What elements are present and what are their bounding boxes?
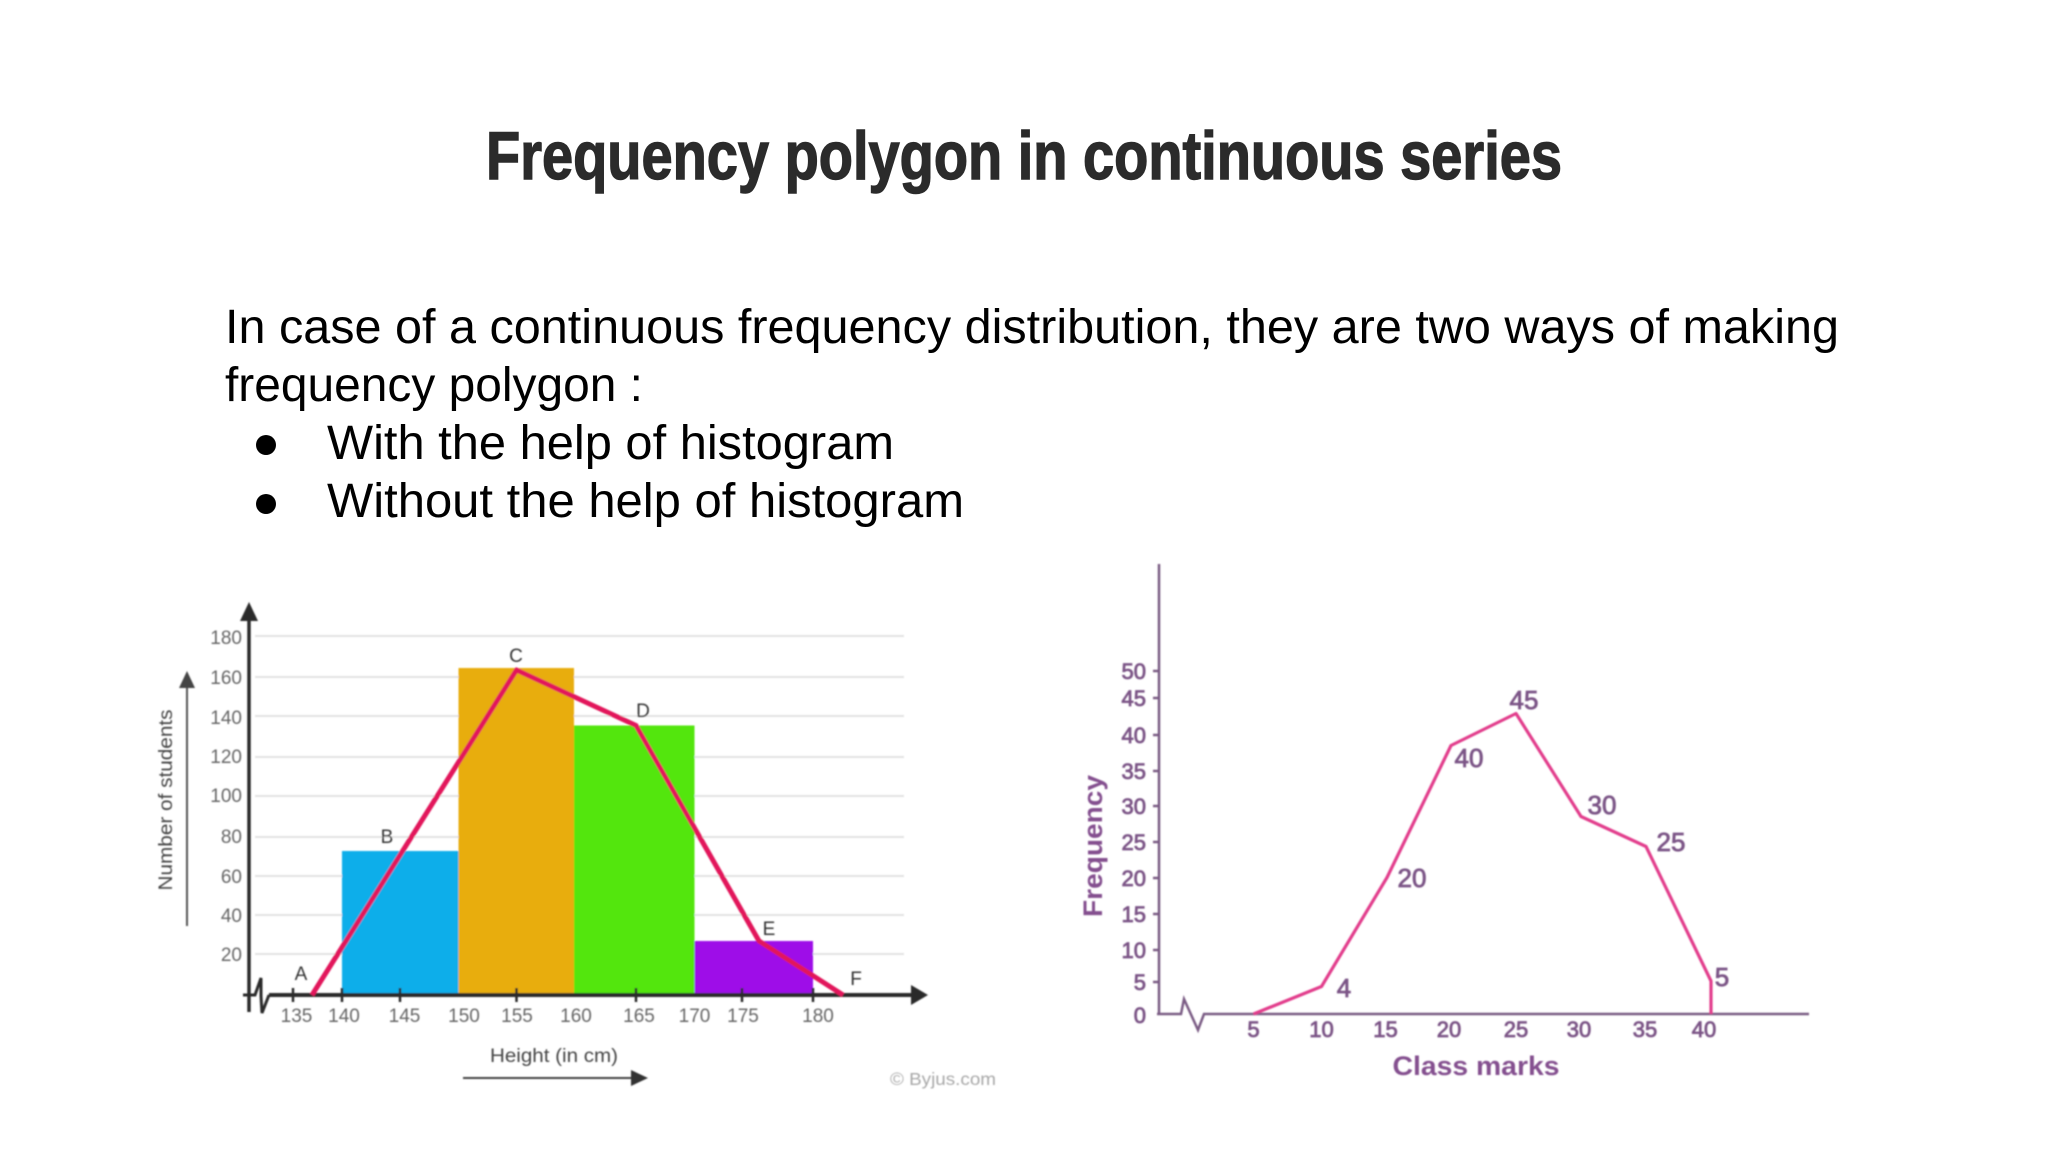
y axis title and arrow [156, 671, 195, 926]
y axis tick labels: 160 [210, 668, 242, 689]
y axis tick labels [210, 628, 242, 966]
x axis tick labels [1247, 1017, 1716, 1042]
y axis tick labels: 45 [1122, 686, 1146, 711]
y axis title: Frequency [1078, 775, 1108, 917]
y axis tick labels: 80 [221, 827, 242, 848]
x axis title and arrow [463, 1046, 648, 1086]
y axis tick labels: 120 [210, 747, 242, 768]
x axis tick labels: 145 [389, 1006, 420, 1027]
x axis tick labels: 175 [727, 1006, 759, 1027]
point labels: A [295, 964, 308, 985]
text block: introduction and bullets: In case of a continuous frequency distribution, they are two ways of making [225, 301, 1839, 354]
x axis tick labels: 150 [448, 1006, 480, 1027]
point labels: C [509, 646, 523, 667]
point labels: 4 [1337, 973, 1351, 1003]
y axis title and arrow: Number of students [156, 710, 177, 890]
x axis tick labels [281, 1006, 834, 1027]
x axis tick labels: 170 [679, 1006, 710, 1027]
y axis tick labels: 10 [1122, 938, 1146, 963]
x axis tick labels: 135 [281, 1006, 312, 1027]
x axis tick labels: 30 [1567, 1017, 1591, 1042]
credit: © Byjus.com [890, 1069, 996, 1089]
x axis title and arrow: Height (in cm) [490, 1046, 618, 1067]
y axis tick labels: 140 [210, 708, 242, 729]
text block: introduction and bullets: With the help of histogram [327, 417, 894, 470]
point labels: 45 [1510, 685, 1538, 715]
x axis tick labels: 165 [623, 1006, 655, 1027]
point labels: F [850, 969, 862, 990]
y axis tick labels: 60 [221, 867, 242, 888]
point labels: E [763, 919, 775, 940]
point labels: 25 [1657, 827, 1685, 857]
y axis tick labels: 20 [1122, 866, 1146, 891]
text block: introduction and bullets: frequency polygon : [225, 359, 643, 412]
point labels: 20 [1398, 863, 1426, 893]
x axis tick labels: 10 [1309, 1017, 1334, 1042]
histogram bars [342, 668, 813, 995]
polygon line [1254, 714, 1711, 1014]
y axis tick labels: 0 [1134, 1003, 1146, 1028]
chart: frequency polygon without histogram [1078, 564, 1809, 1081]
point labels: D [636, 701, 650, 722]
y axis tick labels: 40 [221, 906, 242, 927]
point labels: 30 [1588, 790, 1616, 820]
x axis tick labels: 155 [501, 1006, 533, 1027]
x axis tick labels: 5 [1247, 1017, 1260, 1042]
x axis tick labels: 35 [1633, 1017, 1657, 1042]
x axis tick labels: 140 [328, 1006, 360, 1027]
y axis tick labels: 100 [210, 786, 242, 807]
y axis tick labels: 25 [1122, 830, 1146, 855]
frequency polygon line [312, 670, 843, 995]
x axis tick labels: 160 [560, 1006, 592, 1027]
text block: introduction and bullets [225, 301, 1839, 528]
text block: introduction and bullets: Without the help of histogram [327, 475, 964, 528]
axis arrowheads [240, 602, 928, 1005]
x axis tick labels: 20 [1437, 1017, 1461, 1042]
y axis tick labels: 20 [221, 945, 242, 966]
y axis tick labels [1122, 659, 1146, 1028]
x axis tick labels: 180 [802, 1006, 834, 1027]
x axis tick labels: 25 [1504, 1017, 1528, 1042]
point labels: 5 [1715, 962, 1729, 992]
y axis tick labels: 5 [1134, 970, 1146, 995]
point labels [1337, 685, 1729, 1003]
y axis tick labels: 30 [1122, 794, 1146, 819]
y axis tick labels: 35 [1122, 759, 1146, 784]
x axis title: Class marks [1392, 1051, 1560, 1081]
point labels [295, 646, 862, 990]
chart: histogram with frequency polygon [156, 602, 996, 1089]
x axis tick labels: 40 [1692, 1017, 1716, 1042]
point labels: B [381, 827, 393, 848]
y axis tick labels: 180 [210, 628, 242, 649]
x axis tick labels: 15 [1373, 1017, 1398, 1042]
title: Frequency polygon in continuous series [486, 118, 1562, 194]
axes and break [1153, 564, 1809, 1030]
y axis tick labels: 15 [1122, 902, 1146, 927]
y axis tick labels: 50 [1122, 659, 1146, 684]
point labels: 40 [1455, 743, 1483, 773]
axes [243, 612, 918, 1013]
y axis tick labels: 40 [1122, 723, 1146, 748]
